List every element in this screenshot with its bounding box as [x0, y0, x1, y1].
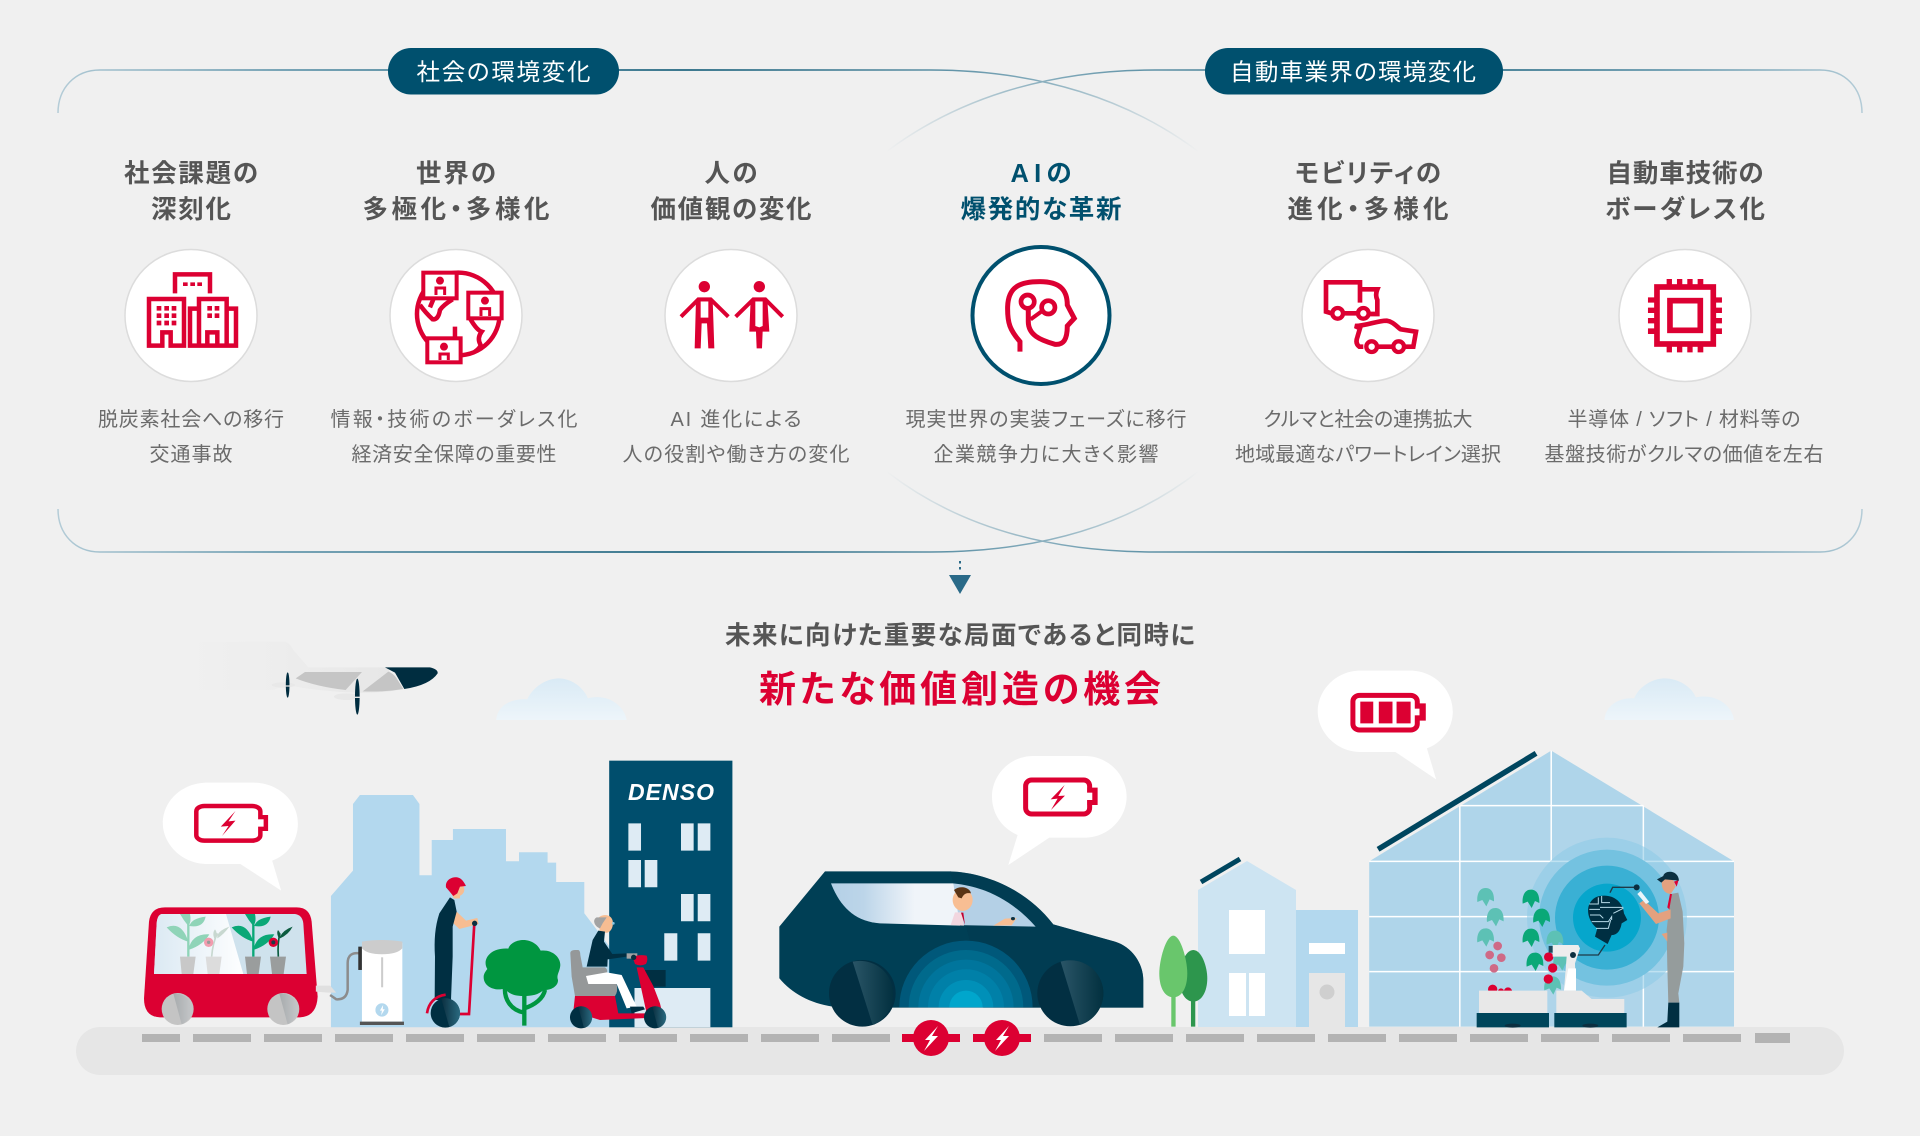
farm robot, plants and AI — [1477, 838, 1687, 1028]
column: human values — [622, 160, 850, 466]
column: mobility: モビリティの — [1295, 160, 1441, 188]
label: society environment change — [388, 48, 619, 94]
car window — [953, 883, 1036, 927]
person on mobility scooter — [570, 915, 666, 1028]
worker — [1637, 872, 1684, 1027]
column: human values: 人の役割や働き方の変化 — [622, 443, 850, 466]
tree — [484, 940, 560, 1026]
icon: chip — [1648, 279, 1722, 352]
city silhouette — [331, 795, 638, 1027]
road — [76, 1027, 1844, 1075]
label: auto industry environment change: 自動車業界の環境変化 — [1230, 59, 1476, 85]
column: multipolar world: 経済安全保障の重要性 — [352, 443, 556, 466]
column: multipolar world: 世界の — [416, 160, 496, 188]
car wheels — [829, 960, 896, 1027]
column: AI revolution: AIの — [1010, 160, 1072, 188]
icon: AI head — [1008, 282, 1074, 352]
cloud left — [496, 678, 627, 720]
DENSO logo: DENSO — [628, 779, 714, 805]
bubble: bus battery — [163, 783, 298, 891]
headline: new value creation: 新たな価値創造の機会 — [759, 669, 1161, 710]
driver — [951, 887, 1017, 926]
autonomous shuttle bus — [144, 907, 318, 1025]
plants — [1477, 888, 1570, 995]
icon: two people — [681, 281, 783, 348]
AI signal rings — [1527, 838, 1687, 998]
overlapping frames — [58, 70, 1862, 552]
column: social issues: 深刻化 — [151, 196, 231, 224]
column: human values: 人の — [704, 160, 758, 188]
column: automotive technology: ボーダレス化 — [1605, 195, 1765, 224]
label: society environment change: 社会の環境変化 — [416, 59, 590, 85]
wireless charging waves — [899, 940, 1033, 1008]
arrow down — [949, 561, 971, 594]
charging points on road — [902, 1020, 1031, 1056]
column: automotive technology: 半導体 / ソフト / 材料等の — [1568, 408, 1800, 431]
label: auto industry environment change — [1205, 48, 1503, 94]
column: multipolar world: 情報・技術のボーダレス化 — [330, 408, 578, 431]
column: multipolar world: 多極化・多様化 — [362, 196, 550, 224]
column: AI revolution: 現実世界の実装フェーズに移行 — [906, 408, 1186, 431]
column: mobility: クルマと社会の連携拡大 — [1264, 408, 1472, 431]
column: automotive technology — [1544, 160, 1824, 466]
headline: 未来に向けた重要な局面であると同時に — [725, 622, 1195, 650]
column: AI revolution: 企業競争力に大きく影響 — [934, 443, 1158, 466]
bubble: car battery — [992, 756, 1127, 865]
column: human values: AI 進化による — [670, 408, 802, 431]
trees by house — [1159, 936, 1207, 1027]
bus plants — [167, 914, 293, 957]
icon: buildings — [149, 274, 236, 346]
icon: truck and car — [1326, 282, 1416, 352]
cloud right — [1604, 678, 1734, 720]
column: automotive technology: 基盤技術がクルマの価値を左右 — [1544, 443, 1824, 466]
DENSO building — [609, 761, 732, 1027]
column: automotive technology: 自動車技術の — [1606, 160, 1764, 188]
column: social issues: 交通事故 — [150, 443, 232, 466]
person on personal mobility — [427, 877, 479, 1028]
column: AI revolution — [906, 160, 1186, 466]
column: mobility — [1235, 160, 1501, 466]
carts — [1477, 991, 1627, 1028]
column: social issues — [98, 160, 284, 466]
AI head with circuits — [1573, 884, 1640, 955]
air mobility plane — [180, 642, 438, 715]
bubble: full battery — [1318, 671, 1453, 779]
house — [1198, 859, 1358, 1027]
charging station — [316, 940, 404, 1025]
column: mobility: 地域最適なパワートレイン選択 — [1235, 443, 1501, 466]
icon: globe with people — [417, 273, 502, 362]
column: human values: 価値観の変化 — [650, 196, 812, 224]
column: mobility: 進化・多様化 — [1288, 196, 1448, 224]
greenhouse — [1369, 751, 1734, 1027]
column: AI revolution: 爆発的な革新 — [960, 196, 1122, 224]
robot arm — [1549, 945, 1580, 991]
column: multipolar world — [330, 160, 578, 466]
column: social issues: 社会課題の — [124, 160, 258, 188]
column: social issues: 脱炭素社会への移行 — [98, 408, 284, 431]
car with wireless charging — [779, 871, 1144, 1027]
city and DENSO building — [331, 761, 732, 1027]
